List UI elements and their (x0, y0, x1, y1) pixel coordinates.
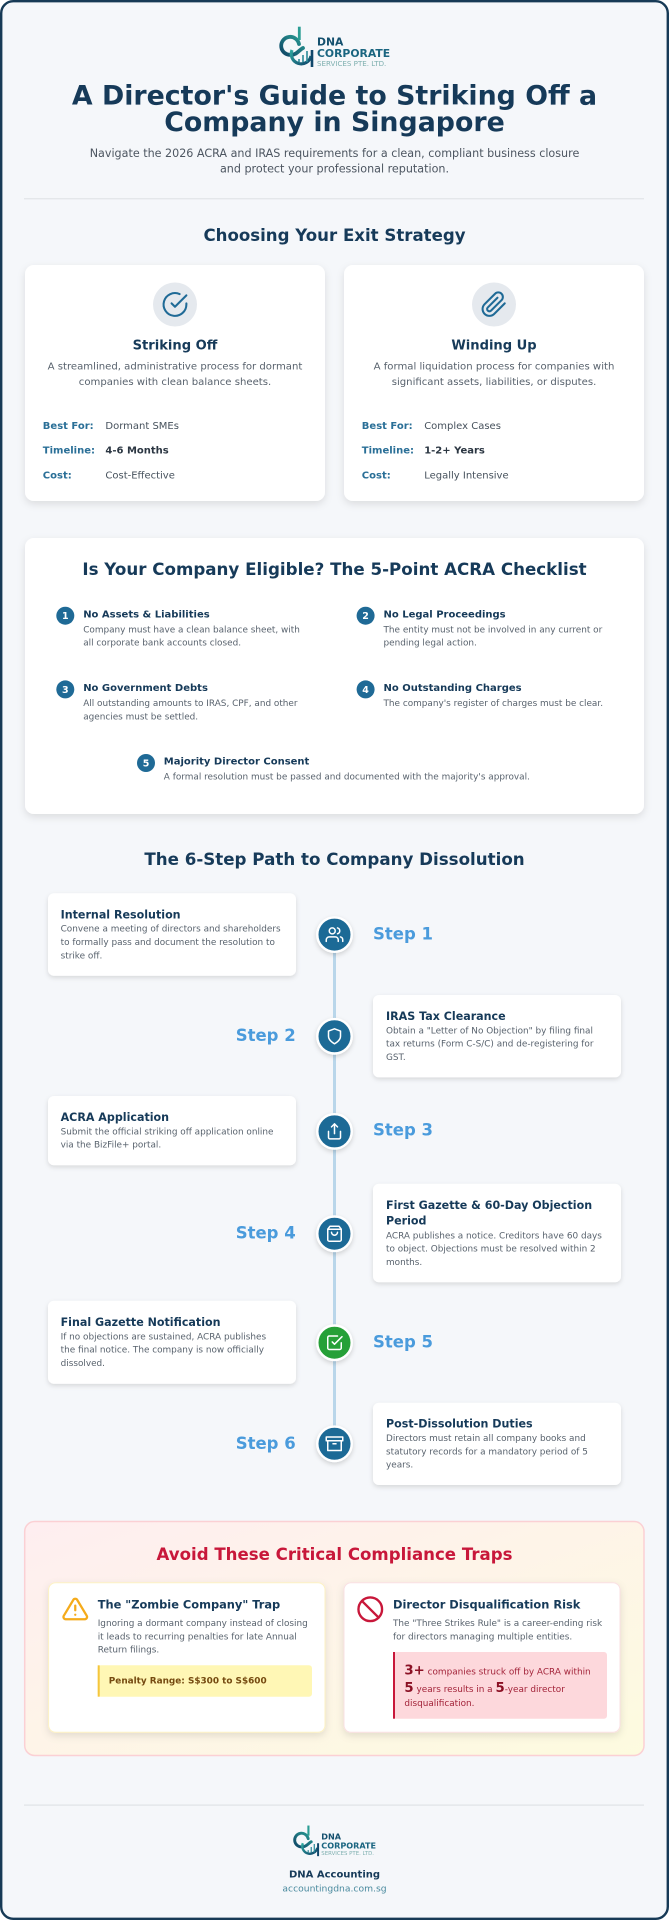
card: zombie company trap: The "Zombie Company" Trap (98, 1597, 280, 1611)
step 4: Step 4 (236, 1223, 296, 1242)
step 6: Step 6 (236, 1434, 296, 1453)
card: zombie company trap: Ignoring a dormant company instead of closing (98, 1619, 308, 1629)
footer logo: SERVICES PTE. LTD. (321, 1851, 374, 1857)
step 1 (48, 893, 433, 976)
card heading: Striking Off (133, 338, 218, 353)
step 5: dissolved. (61, 1359, 105, 1369)
icon: upload share (328, 1124, 340, 1139)
footer company name: DNA Accounting (289, 1869, 380, 1880)
header logo (281, 27, 390, 68)
card: zombie company trap: it leads to recurring penalties for late Annual (98, 1632, 297, 1642)
step 5: the final notice. The company is now officially (61, 1346, 264, 1356)
checklist item 3: No Government Debts (83, 683, 208, 694)
step 4: to object. Objections must be resolved within 2 (386, 1245, 596, 1255)
card: director disqualification risk: The "Three Strikes Rule" is a career-ending risk (392, 1619, 603, 1629)
step 4: ACRA publishes a notice. Creditors have 60 days (386, 1231, 602, 1241)
card: zombie company trap: Return filings. (98, 1646, 159, 1656)
checklist item 1: Company must have a clean balance sheet, with (83, 625, 300, 635)
callout: three strikes rule: 3+ companies struck off by ACRA within (404, 1663, 591, 1678)
step 5: If no objections are sustained, ACRA publishes (61, 1332, 266, 1342)
step 6: years. (386, 1461, 413, 1471)
details table: Complex Cases (424, 421, 501, 432)
step 2 (236, 995, 621, 1077)
step 4: months. (386, 1258, 422, 1268)
step 4: Period (386, 1215, 427, 1228)
checklist item 1: No Assets & Liabilities (83, 609, 210, 620)
icon: DNA logo mark (281, 27, 312, 67)
icon: archive (326, 1437, 343, 1451)
title: Company in Singapore (164, 107, 505, 138)
checklist item 5: A formal resolution must be passed and documented with the majority's approval. (164, 772, 530, 782)
heading: Is Your Company Eligible? The 5-Point ACRA Checklist (82, 559, 587, 579)
heading: 6-step path: The 6-Step Path to Company Dissolution (144, 849, 525, 869)
details table: Best For: (43, 421, 94, 432)
checklist item 2 (357, 607, 603, 649)
checklist item 5: 5 (143, 758, 149, 769)
step 3: via the BizFile+ portal. (61, 1141, 161, 1151)
timeline connector line (333, 950, 336, 1430)
step 5: Final Gazette Notification (61, 1316, 221, 1329)
icon: DNA logo mark (295, 1826, 318, 1856)
details table: Cost: (362, 470, 391, 481)
details table (43, 421, 179, 481)
step 5: Step 5 (373, 1332, 433, 1351)
card: director disqualification risk (344, 1583, 620, 1732)
icon: users (326, 928, 343, 941)
step 6: Directors must retain all company books and (386, 1434, 586, 1444)
checklist item 3: agencies must be settled. (83, 712, 198, 722)
step 2: tax returns (Form C-S/C) and de-registering for (386, 1040, 594, 1050)
checklist item 5: Majority Director Consent (164, 756, 310, 767)
checklist item 3: 3 (62, 685, 69, 696)
card: director disqualification risk: for directors managing multiple entities. (393, 1632, 572, 1642)
step 2: Obtain a "Letter of No Objection" by filing final (386, 1026, 593, 1036)
heading: Avoid These Critical Compliance Traps (157, 1545, 513, 1564)
card description: companies with clean balance sheets. (79, 377, 271, 388)
checklist item 2: The entity must not be involved in any current or (382, 625, 603, 635)
step 2: IRAS Tax Clearance (386, 1010, 506, 1023)
heading: Choosing Your Exit Strategy: Choosing Your Exit Strategy (203, 226, 466, 245)
details table: Timeline: (362, 446, 414, 457)
subtitle: and protect your professional reputation. (220, 163, 449, 176)
checklist item 2: 2 (362, 611, 369, 622)
details table: Timeline: (43, 446, 95, 457)
icon: prohibited sign (358, 1597, 382, 1621)
checklist item 4 (357, 680, 603, 709)
step 1: Convene a meeting of directors and shareholders (61, 925, 281, 935)
callout: three strikes rule (393, 1652, 607, 1719)
details table (362, 421, 509, 481)
panel: compliance traps (25, 1522, 644, 1756)
card: zombie company trap (49, 1583, 325, 1732)
footer logo: DNA (321, 1831, 342, 1841)
card heading: Winding Up (451, 338, 537, 353)
checklist item 1: 1 (62, 611, 69, 622)
icon: warning triangle (63, 1599, 87, 1619)
callout: three strikes rule: disqualification. (404, 1699, 474, 1709)
timeline (48, 893, 621, 1485)
callout: three strikes rule: 5 years results in a 5-year director (404, 1681, 565, 1696)
step 6 (236, 1403, 621, 1485)
details table: Dormant SMEs (105, 421, 179, 432)
footer logo: CORPORATE (321, 1841, 376, 1851)
icon: shield (328, 1029, 340, 1044)
checklist item 1 (56, 607, 300, 649)
step 4 (236, 1184, 621, 1282)
callout: penalty range: Penalty Range: S$300 to S$600 (109, 1677, 267, 1687)
icon: paperclip (472, 282, 516, 326)
step 6: Post-Dissolution Duties (386, 1418, 533, 1431)
icon: check square (328, 1336, 342, 1349)
step 1: strike off. (61, 951, 102, 961)
step 3: Submit the official striking off application online (61, 1127, 273, 1137)
details table: Best For: (362, 421, 413, 432)
card description: A formal liquidation process for companies with (374, 361, 614, 372)
details table: Legally Intensive (424, 470, 509, 481)
callout: penalty range (98, 1665, 312, 1697)
step 2: GST. (386, 1053, 406, 1063)
checklist item 3 (56, 680, 298, 722)
details table: 1-2+ Years (424, 446, 485, 457)
step 1: to formally pass and document the resolution to (61, 938, 275, 948)
title: A Director's Guide to Striking Off a (72, 80, 597, 112)
header logo: DNA (317, 36, 344, 49)
icon: check circle (153, 282, 197, 326)
step 1: Internal Resolution (61, 908, 181, 921)
panel: eligibility checklist (25, 538, 644, 814)
subtitle: Navigate the 2026 ACRA and IRAS requirements for a clean, compliant business closure (90, 147, 579, 160)
details table: Cost-Effective (105, 470, 175, 481)
details table: Cost: (43, 470, 72, 481)
step 1: Step 1 (373, 924, 433, 943)
checklist item 3: All outstanding amounts to IRAS, CPF, and other (83, 699, 298, 709)
checklist item 4: 4 (362, 685, 369, 696)
checklist item 4: The company's register of charges must be clear. (382, 699, 603, 709)
card: director disqualification risk: Director Disqualification Risk (393, 1597, 581, 1611)
card description: A streamlined, administrative process for dormant (48, 361, 302, 372)
step 3: Step 3 (373, 1121, 433, 1140)
checklist item 4: No Outstanding Charges (384, 683, 522, 694)
footer website: accountingdna.com.sg (282, 1884, 387, 1895)
checklist item 1: all corporate bank accounts closed. (83, 639, 241, 649)
panel: Striking Off (25, 265, 325, 501)
step 4: First Gazette & 60-Day Objection (386, 1199, 592, 1212)
checklist item 2: pending legal action. (384, 639, 477, 649)
checklist item 5 (137, 754, 530, 782)
card description: significant assets, liabilities, or disputes. (392, 377, 596, 388)
step 2: Step 2 (236, 1026, 296, 1045)
checklist item 2: No Legal Proceedings (384, 609, 506, 620)
footer logo (295, 1826, 376, 1857)
step 5 (48, 1301, 433, 1384)
header logo: CORPORATE (317, 47, 390, 60)
panel: Winding Up (344, 265, 644, 501)
step 6: statutory records for a mandatory period of 5 (386, 1447, 588, 1457)
step 3 (48, 1096, 433, 1165)
details table: 4-6 Months (105, 446, 169, 457)
header logo: SERVICES PTE. LTD. (317, 59, 386, 68)
icon: shopping bag (328, 1226, 341, 1241)
step 3: ACRA Application (61, 1111, 169, 1124)
